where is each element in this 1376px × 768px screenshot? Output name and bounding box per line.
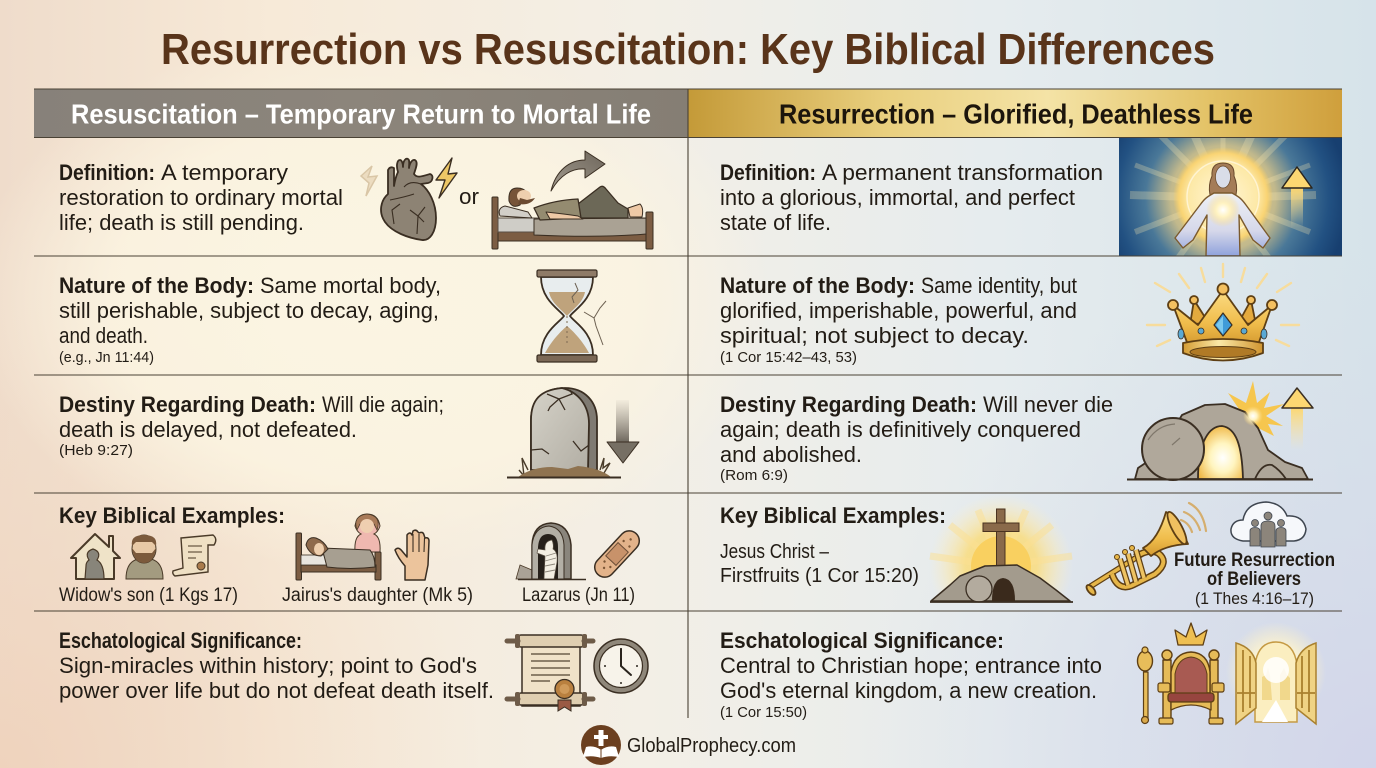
- icon: heart with lightning: [361, 158, 457, 240]
- icon: bearded man: [126, 535, 163, 579]
- icon: scroll with ribbon seal: [507, 634, 593, 711]
- row: definition (resurrection): Definition:: [720, 160, 816, 185]
- row: nature of the body (resuscitation): still perishable, subject to decay, aging,: [59, 298, 439, 323]
- row: nature of the body (resurrection): spiritual; not subject to decay.: [720, 323, 1029, 348]
- row: nature of the body (resuscitation): Same mortal body,: [260, 273, 441, 298]
- row: destiny regarding death (resuscitation): [59, 392, 444, 459]
- label: future resurrection of believers: [1174, 550, 1335, 608]
- label: jesus christ firstfruits: Firstfruits (1 Cor 15:20): [720, 565, 919, 587]
- left column header: [34, 89, 688, 138]
- row: eschatological significance (resurrection): [720, 628, 1102, 721]
- row: key biblical examples (resuscitation): [59, 503, 643, 606]
- icon: raised hand: [395, 530, 429, 580]
- icon: lazarus in tomb: [516, 523, 586, 580]
- footer: logo and site name: [581, 725, 796, 765]
- row: nature of the body (resurrection): Same identity, but: [921, 273, 1078, 298]
- row: nature of the body (resurrection): Nature of the Body:: [720, 273, 915, 298]
- icon: clock: [594, 639, 648, 693]
- panel: resurrection column: [688, 89, 1342, 724]
- heading: key examples: Key Biblical Examples:: [59, 503, 285, 528]
- icon: open golden gates with city: [1226, 622, 1326, 724]
- row: eschatological significance (resurrection): Central to Christian hope; entrance into: [720, 653, 1102, 678]
- row: destiny regarding death (resurrection): Destiny Regarding Death:: [720, 392, 977, 417]
- grid lines: [34, 89, 1342, 718]
- row: nature of the body (resuscitation): Nature of the Body:: [59, 273, 254, 298]
- row: eschatological significance (resurrection): God's eternal kingdom, a new creation.: [720, 678, 1097, 703]
- row: nature of the body (resurrection): [720, 273, 1078, 366]
- row: destiny regarding death (resuscitation): Destiny Regarding Death:: [59, 392, 316, 417]
- row: definition (resuscitation): [59, 160, 343, 235]
- row: definition (resurrection): state of life.: [720, 210, 831, 235]
- site name: GlobalProphecy.com: [627, 735, 796, 757]
- left column header: Resuscitation – Temporary Return to Mortal Life: [71, 98, 651, 130]
- label: or: or: [459, 184, 479, 209]
- icon: cracked hourglass: [537, 270, 606, 362]
- icon: man rising from bed with arrow: [492, 151, 653, 249]
- row: destiny regarding death (resurrection): Will never die: [983, 392, 1113, 417]
- icon: cross and open book logo: [581, 725, 621, 765]
- icon: upward arrow: [1282, 388, 1313, 450]
- icon: throne with crown: [1158, 623, 1224, 724]
- icon: scroll with seal: [173, 535, 216, 576]
- right column header: [688, 89, 1342, 138]
- row: destiny regarding death (resuscitation): (Heb 9:27): [59, 442, 133, 459]
- row: eschatological significance (resuscitation): [59, 628, 494, 703]
- icon: scepter: [1138, 647, 1152, 724]
- row: definition (resurrection): [720, 160, 1103, 235]
- label: widow's son: Widow's son (1 Kgs 17): [59, 585, 238, 606]
- row: nature of the body (resuscitation): [59, 273, 441, 366]
- icon: cracked gravestone: [507, 388, 621, 478]
- icon: empty tomb with rolled stone: [1127, 381, 1313, 480]
- panel: resuscitation column: [34, 89, 688, 711]
- title: Resurrection vs Resuscitation: Key Biblical Differences: [161, 26, 1215, 74]
- row: nature of the body (resurrection): glorified, imperishable, powerful, and: [720, 298, 1077, 323]
- row: definition (resuscitation): Definition:: [59, 160, 155, 185]
- icon: house with widow and son: [71, 534, 120, 579]
- icon: downward arrow: [607, 400, 639, 463]
- heading: key examples: Key Biblical Examples:: [720, 503, 946, 528]
- row: eschatological significance (resuscitation): Sign-miracles within history; point to God's: [59, 653, 477, 678]
- row: definition (resuscitation): life; death is still pending.: [59, 210, 304, 235]
- row: nature of the body (resurrection): (1 Cor 15:42–43, 53): [720, 349, 857, 366]
- label: future resurrection of believers: of Believers: [1207, 569, 1301, 590]
- row: destiny regarding death (resurrection): and abolished.: [720, 442, 862, 467]
- row: destiny regarding death (resurrection): [720, 392, 1113, 484]
- label: jesus christ firstfruits: Jesus Christ –: [720, 541, 830, 563]
- row: destiny regarding death (resuscitation): Will die again;: [322, 392, 444, 417]
- row: key biblical examples (resurrection): [720, 500, 1334, 608]
- icon: cross on hill with sunrise: [930, 500, 1073, 603]
- right column header: Resurrection – Glorified, Deathless Life: [779, 98, 1253, 130]
- row: definition (resuscitation): A temporary: [161, 160, 289, 185]
- row: destiny regarding death (resurrection): (Rom 6:9): [720, 467, 788, 484]
- icon: cloud with people: [1231, 502, 1306, 547]
- row: definition (resuscitation): restoration to ordinary mortal: [59, 185, 343, 210]
- icon: trumpet: [1085, 503, 1206, 597]
- label: future resurrection of believers: (1 Thes 4:16–17): [1195, 590, 1314, 608]
- row: eschatological significance (resurrection): (1 Cor 15:50): [720, 704, 807, 721]
- row: definition (resurrection): A permanent transformation: [822, 160, 1103, 185]
- row: eschatological significance (resurrection): Eschatological Significance:: [720, 628, 1004, 653]
- icon: glorified figure panel: [1119, 138, 1342, 256]
- label: jesus christ firstfruits: [720, 541, 919, 587]
- row: nature of the body (resuscitation): (e.g., Jn 11:44): [59, 349, 154, 366]
- row: nature of the body (resuscitation): and death.: [59, 323, 148, 348]
- row: definition (resurrection): into a glorious, immortal, and perfect: [720, 185, 1076, 210]
- row: destiny regarding death (resurrection): again; death is definitively conquered: [720, 417, 1081, 442]
- label: future resurrection of believers: Future Resurrection: [1174, 550, 1335, 571]
- row: eschatological significance (resuscitation): power over life but do not defeat death itself.: [59, 678, 494, 703]
- icon: golden crown: [1147, 264, 1299, 360]
- label: jairus's daughter: Jairus's daughter (Mk 5): [282, 585, 473, 606]
- icon: bandage: [591, 527, 643, 581]
- label: lazarus: Lazarus (Jn 11): [522, 585, 635, 606]
- row: destiny regarding death (resuscitation): death is delayed, not defeated.: [59, 417, 357, 442]
- row: eschatological significance (resuscitation): Eschatological Significance:: [59, 628, 302, 653]
- icon: girl in bed with person standing: [296, 514, 381, 580]
